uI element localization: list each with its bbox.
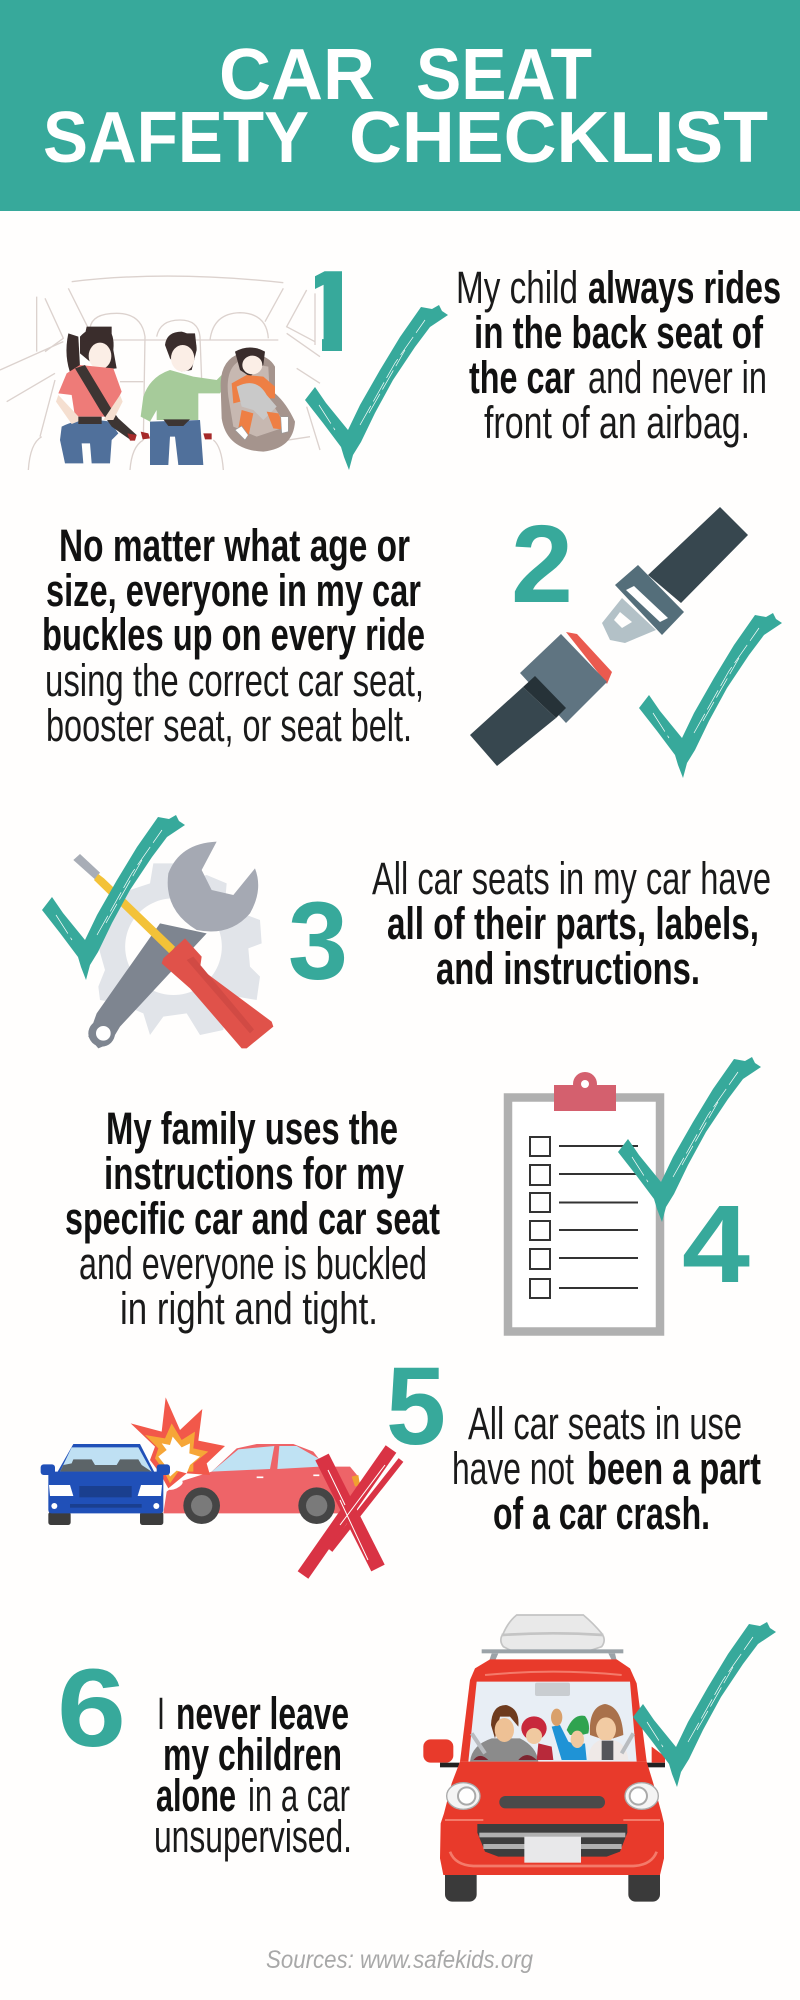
title banner: SAFETY bbox=[43, 98, 309, 178]
text: item 3 bbox=[372, 853, 771, 994]
number 5: 5 bbox=[386, 1345, 446, 1468]
text: item 5: have not bbox=[452, 1443, 574, 1494]
text: item 2: using the correct car seat, bbox=[45, 655, 424, 706]
text: item 2: size, everyone in my car bbox=[46, 565, 421, 616]
lower body bbox=[440, 1762, 664, 1875]
passengers bbox=[470, 1738, 538, 1762]
text: item 4 bbox=[65, 1103, 440, 1334]
text: item 2: booster seat, or seat belt. bbox=[46, 700, 412, 751]
illustration: family in back seat bbox=[0, 276, 320, 470]
illustration: car crash bbox=[41, 1397, 360, 1525]
icon: check mark 2 bbox=[639, 613, 782, 778]
icon: check mark 1 bbox=[305, 305, 448, 470]
text: item 2 bbox=[42, 520, 425, 751]
text: item 6: my children bbox=[163, 1729, 342, 1780]
illustration: family in red car bbox=[423, 1615, 665, 1902]
title banner: CAR bbox=[219, 35, 375, 115]
text: item 5: of a car crash. bbox=[493, 1488, 710, 1539]
panel: item 5 no crash bbox=[41, 1345, 761, 1575]
text: item 6: unsupervised. bbox=[154, 1811, 352, 1862]
text: item 4: and everyone is buckled bbox=[79, 1238, 427, 1289]
number 1: 1 bbox=[290, 246, 370, 376]
icon: check mark 6 bbox=[633, 1622, 776, 1787]
text: item 4: specific car and car seat bbox=[65, 1193, 440, 1244]
icon: check mark 3 bbox=[42, 815, 185, 980]
panel: item 4 instructions bbox=[65, 1057, 761, 1334]
panel: item 6 never alone bbox=[57, 1615, 776, 1902]
illustration: wrench, screwdriver and gear bbox=[73, 842, 273, 1048]
text: item 1 bbox=[456, 262, 781, 448]
text: item 2: No matter what age or bbox=[59, 520, 410, 571]
icon: seat belt bbox=[470, 507, 748, 766]
text: item 4: instructions for my bbox=[104, 1148, 404, 1199]
number 2: 2 bbox=[511, 503, 573, 626]
panel: item 3 parts and labels bbox=[42, 815, 771, 1048]
number 4: 4 bbox=[682, 1183, 750, 1306]
text: item 2: buckles up on every ride bbox=[42, 609, 425, 660]
source credit: Sources: www.safekids.org bbox=[266, 1946, 533, 1974]
text: item 5 bbox=[452, 1398, 761, 1539]
text: item 6: never leave bbox=[176, 1688, 349, 1739]
text: item 6 bbox=[154, 1688, 352, 1862]
text: item 6: alone bbox=[156, 1770, 236, 1821]
panel: item 1 back seat bbox=[0, 270, 780, 470]
icon: clipboard checklist bbox=[508, 1072, 660, 1332]
title banner bbox=[0, 0, 800, 211]
icon: check mark 4 bbox=[618, 1057, 761, 1222]
number 3: 3 bbox=[288, 880, 348, 1003]
text: item 6: in a car bbox=[248, 1770, 350, 1821]
text: item 3: and instructions. bbox=[436, 943, 700, 994]
title banner: CHECKLIST bbox=[349, 98, 768, 178]
text: item 1: My child bbox=[456, 262, 578, 313]
text: item 6: I bbox=[157, 1688, 165, 1739]
text: item 4: in right and tight. bbox=[120, 1283, 378, 1334]
number 6: 6 bbox=[57, 1647, 126, 1770]
icon: red X bbox=[303, 1449, 401, 1575]
text: item 4: My family uses the bbox=[106, 1103, 398, 1154]
panel: item 2 everyone buckles up bbox=[42, 503, 782, 778]
title banner: SEAT bbox=[416, 35, 592, 115]
mirrors bbox=[423, 1739, 453, 1763]
text: item 1: the car bbox=[469, 352, 575, 403]
